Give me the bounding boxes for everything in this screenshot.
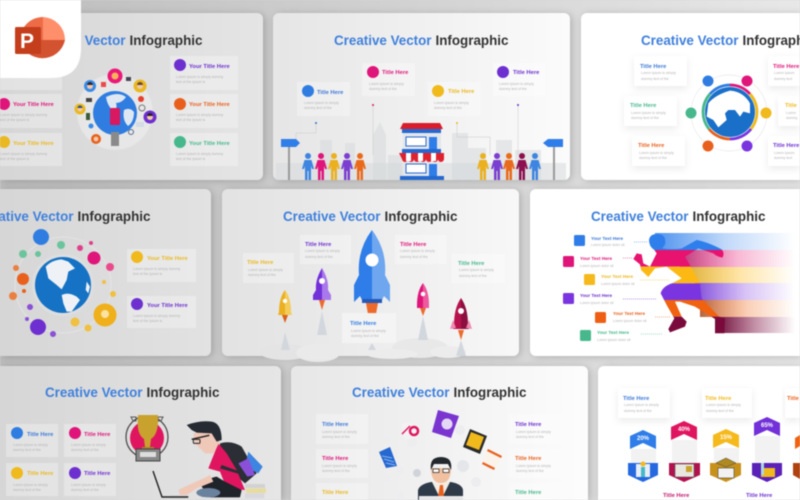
runner silhouette [632, 234, 726, 334]
report sheet [482, 449, 502, 470]
panel 9 cards: Title [787, 396, 800, 402]
panel 8 cards: dummy text of the [322, 469, 350, 473]
right people [477, 153, 541, 180]
panel 1 left cards: Your Title Here [13, 141, 54, 147]
panel 8 cards [316, 414, 562, 500]
panel 1 left cards: Your Title Here [13, 102, 54, 108]
panel 1 right cards: Lorem Ipsum is simply dummy [176, 113, 224, 117]
panel: earth with dots [0, 189, 211, 356]
runner list: Your Text Here [597, 330, 629, 335]
left signpost [281, 139, 300, 180]
panel 7 cards: Title Here [27, 471, 54, 477]
panel 5 cards: dummy text of the [351, 334, 379, 338]
info cards: Lorem Ipsum is simply [499, 82, 534, 86]
panel 8 cards: Lorem Ipsum is simply [322, 430, 357, 434]
dotted connectors [623, 242, 670, 334]
left people [302, 153, 366, 180]
panel 4 cards: text of the ipsum is [133, 272, 162, 276]
panel: percent hexagons [598, 366, 800, 500]
tablet [463, 429, 487, 454]
panel 3 cards: dummy text [774, 77, 792, 81]
runner list: Lorem ipsum dolor sit [580, 301, 613, 305]
panel 3 cards: dummy text of the [631, 116, 659, 120]
powerpoint logo tab [0, 0, 81, 78]
panel 3 cards [624, 56, 800, 166]
icon hexagon orange [793, 463, 800, 479]
panel: shop and people [273, 13, 570, 180]
right signpost [543, 139, 563, 180]
calculator [379, 447, 397, 468]
panel 8 cards: dummy text of the [516, 435, 544, 439]
panel 7 cards: dummy text of the [71, 488, 99, 492]
runner list: Your Text Here [580, 293, 612, 298]
runner list: Lorem ipsum dolor sit [591, 243, 624, 247]
panel 8 cards: dummy text of the [322, 435, 350, 439]
panel 5 cards: Title Here [400, 242, 427, 248]
panel 8 heading: Creative Vector Infographic [352, 385, 527, 400]
big blue rocket [354, 230, 390, 314]
panel 9 cards: Lorem Ipsum is simply [624, 403, 659, 407]
icon hexagon purple [752, 463, 782, 482]
percent badge 40: 40% [678, 427, 691, 433]
panel 2 heading: Creative Vector Infographic [334, 33, 509, 48]
percent badge 65 [754, 417, 780, 436]
orbit dots [9, 229, 116, 337]
powerpoint icon: P [20, 30, 34, 53]
panel 3 cards: Title Here [773, 64, 800, 70]
panel 5 cards: Lorem Ipsum is simply [459, 268, 494, 272]
panel 1 right cards: Lorem Ipsum is simply dummy [176, 152, 224, 156]
percent badge orange [795, 435, 800, 449]
smoke clouds [259, 311, 466, 362]
panel 6 heading: Creative Vector Infographic [591, 209, 766, 224]
trophy [126, 415, 168, 461]
yellow rocket [278, 290, 292, 323]
panel 5 cards: Lorem Ipsum is simply [351, 329, 386, 333]
floating doodles [380, 425, 494, 499]
panel: runner [530, 189, 800, 356]
panel 3 cards: Title [785, 103, 798, 109]
purple book [432, 410, 459, 438]
panel 3 cards: Lorem [786, 111, 796, 115]
skyline [276, 122, 566, 180]
panel 9 cards: Title Here [705, 396, 732, 402]
panel 7 cards: dummy text of the [71, 448, 99, 452]
panel 7 cards: Lorem Ipsum is simply [13, 443, 48, 447]
panel 8 cards: Lorem Ipsum is simply [516, 430, 551, 434]
panel 5 cards [243, 235, 505, 343]
panel 3 cards: dummy text of the [639, 156, 667, 160]
info cards: Title Here [513, 70, 540, 76]
panel 9 cards [618, 388, 800, 418]
pie document [401, 422, 418, 440]
info cards: dummy text of the [499, 87, 527, 91]
percent badge 20 [630, 430, 656, 449]
panel 1 left cards: text of the ipsum is [0, 118, 29, 122]
info cards: Lorem Ipsum is simply [304, 101, 339, 105]
callout lines [296, 104, 519, 155]
panel 5 cards: dummy text of the [248, 273, 276, 277]
info cards: dummy text of the [304, 106, 332, 110]
panel 9 cards: Lorem Ipsum is simply [706, 403, 741, 407]
info cards: Lorem Ipsum is simply [434, 101, 469, 105]
panel 1 left cards: Lorem Ipsum is simply dummy [0, 113, 48, 117]
panel: globe with avatars [0, 13, 263, 180]
panel 1 left cards: text of the ipsum is [0, 157, 29, 161]
percent badge 15: 15% [720, 435, 733, 441]
panel 3 cards: Title Here [638, 143, 665, 149]
speed stripes [655, 233, 795, 333]
panel 5 cards: dummy text of the [459, 274, 487, 278]
panel 1 right cards: text of the ipsum is [176, 80, 205, 84]
bottom title purple: Title Here [746, 493, 773, 499]
panel 8 cards: Title Here [322, 456, 349, 462]
panel 5 cards: Title Here [247, 260, 274, 266]
panel: globe ring [581, 13, 800, 180]
runner list: Your Text Here [591, 236, 623, 241]
panel 1 heading: Creative Vector Infographic [28, 33, 203, 48]
panel 1 left cards [0, 55, 62, 166]
panel 7 heading: Creative Vector Infographic [45, 385, 220, 400]
panel 3 cards: Title Here [773, 143, 800, 149]
runner list: Your Text Here [613, 311, 645, 316]
panel 1 right cards: Your Title Here [189, 102, 230, 108]
panel 5 cards: Title Here [458, 261, 485, 267]
panel 5 cards: Lorem Ipsum is simply [400, 249, 435, 253]
student with backpack [170, 421, 266, 498]
info cards: Title Here [448, 89, 475, 95]
panel 7 cards [6, 424, 116, 496]
percent badge 40 [671, 421, 697, 440]
panel 3 cards: Lorem Ipsum [774, 71, 795, 75]
info cards: dummy text of the [434, 106, 462, 110]
panel 9 cards: dummy text of the [624, 409, 652, 413]
globe with phone and avatars [74, 68, 156, 150]
panel 3 cards: Lorem Ipsum is simply [639, 151, 674, 155]
panel 5 heading: Creative Vector Infographic [283, 209, 458, 224]
panel 5 cards: Title Here [350, 321, 377, 327]
runner list: Lorem ipsum dolor sit [597, 338, 630, 342]
panel 1 right cards: Your Title Here [189, 64, 230, 70]
runner list [563, 235, 646, 342]
panel 8 cards: Title Here [515, 456, 542, 462]
runner list: Lorem ipsum dolor sit [601, 282, 634, 286]
panel 3 cards: Lorem Ipsum is simply [641, 71, 676, 75]
pink rocket [417, 283, 429, 316]
icon hexagon maroon [669, 463, 700, 482]
panel 5 cards: dummy text of the [400, 255, 428, 259]
percent badge 15 [713, 429, 739, 448]
panel 1 right cards: Your Title Here [189, 141, 230, 147]
shop building [399, 123, 444, 180]
runner list: Your Text Here [580, 256, 612, 261]
earth globe [15, 237, 111, 333]
panel 9 cards: dummy text of the [706, 409, 734, 413]
runner list: Lorem ipsum dolor sit [613, 319, 646, 323]
panel 5 cards: dummy text of the [305, 255, 333, 259]
panel 8 cards: Lorem Ipsum is simply [516, 464, 551, 468]
info cards: Title Here [382, 70, 409, 76]
runner list: Lorem ipsum dolor sit [580, 264, 613, 268]
panel 7 cards: dummy text of the [13, 448, 41, 452]
panel 1 right cards [170, 56, 238, 166]
info cards: Lorem Ipsum is simply [369, 82, 404, 86]
info cards: dummy text of the [369, 87, 397, 91]
laptop [153, 471, 188, 497]
runner list: Your Text Here [601, 274, 633, 279]
panel 3 cards: dummy [786, 116, 798, 120]
panel 8 cards: Lorem Ipsum is simply [322, 464, 357, 468]
panel 7 cards: dummy text of the [13, 488, 41, 492]
maroon rocket [450, 298, 472, 340]
panel 4 cards: Your Title Here [147, 256, 188, 262]
businessman [418, 457, 463, 500]
panel 7 cards: Lorem Ipsum is simply [71, 483, 106, 487]
info cards: Title Here [317, 90, 344, 96]
panel 1 right cards: text of the ipsum is [176, 118, 205, 122]
panel 7 cards: Title Here [84, 471, 111, 477]
icon hexagon gold [710, 458, 741, 482]
panel 8 cards: Title Here [322, 490, 349, 496]
panel 3 cards: Lorem Ipsum [774, 151, 795, 155]
info cards [297, 63, 545, 116]
panel 4 cards: Lorem Ipsum is simply dummy [133, 267, 181, 271]
panel: rockets [222, 189, 519, 362]
panel 5 cards: Lorem Ipsum is simply [248, 268, 283, 272]
panel 5 cards: Title Here [305, 242, 332, 248]
panel 1 left cards: Lorem Ipsum is simply dummy [0, 152, 48, 156]
panel 4 cards [127, 249, 196, 328]
panel 8 cards: Title Here [515, 422, 542, 428]
panel 4 cards: Your Title Here [147, 303, 188, 309]
panel 1 right cards: Lorem Ipsum is simply dummy [176, 75, 224, 79]
ring globe [686, 75, 772, 152]
panel 8 cards: Title Here [322, 422, 349, 428]
panel: businessman [291, 366, 588, 500]
panel 7 cards: Lorem Ipsum is simply [71, 443, 106, 447]
panel 3 cards: dummy text [774, 156, 792, 160]
panel 9 cards: Title Here [623, 396, 650, 402]
panel 7 cards: Lorem Ipsum is simply [13, 483, 48, 487]
panel 7 cards: Title Here [84, 432, 111, 438]
panel 8 cards: dummy text of the [516, 469, 544, 473]
panel 3 cards: Title Here [640, 64, 667, 70]
bottom title pink: Title Here [663, 493, 690, 499]
panel 3 cards: dummy text of the [641, 77, 669, 81]
percent badge 20: 20% [637, 436, 650, 442]
panel: trophy and student [0, 366, 281, 500]
panel 7 cards: Title Here [27, 432, 54, 438]
purple rocket [313, 268, 331, 310]
panel 4 cards: text of the ipsum is [133, 319, 162, 323]
panel 3 cards: Lorem Ipsum is simply [631, 111, 666, 115]
panel 5 cards: Lorem Ipsum is simply [305, 249, 340, 253]
icon hexagon blue [628, 462, 658, 482]
panel 4 cards: Lorem Ipsum is simply dummy [133, 314, 181, 318]
panel 8 cards: Title Here [515, 490, 542, 496]
percent badge 65: 65% [761, 423, 774, 429]
column connectors [631, 436, 780, 464]
panel 1 right cards: text of the ipsum is [176, 157, 205, 161]
panel 3 cards: Title Here [630, 103, 657, 109]
